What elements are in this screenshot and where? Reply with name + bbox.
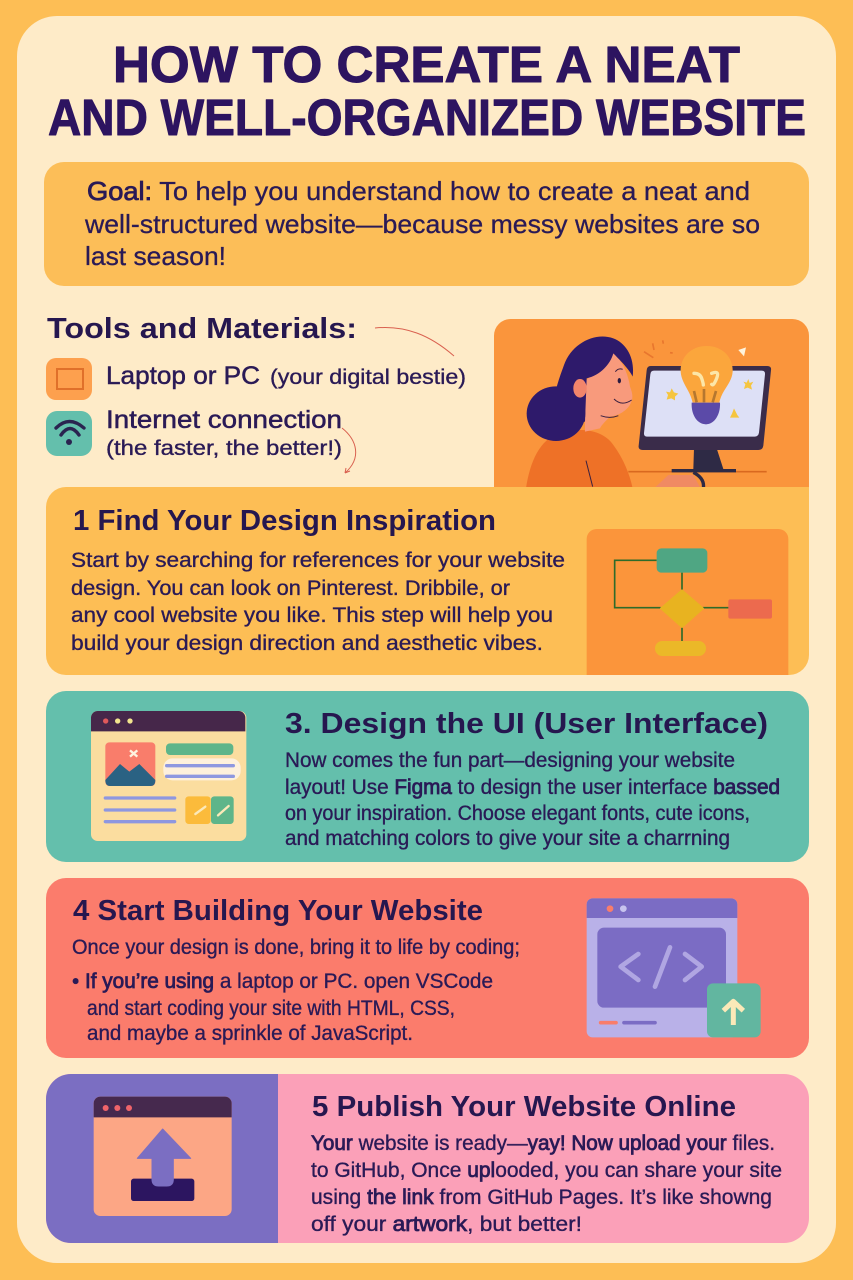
step 4 body: and start coding your site with HTML, CSS, [87,997,455,1020]
illustration: ui wireframe [91,711,246,841]
illustration: upload window [46,1074,278,1243]
arrow: to illustration [375,327,454,356]
step 1 body [71,549,565,655]
icon: wifi [46,411,92,456]
step 3 heading: 3. Design the UI (User Interface) [285,708,768,740]
panel: goal [44,162,809,286]
step 4 body: and maybe a sprinkle of JavaScript. [87,1022,413,1045]
step 3 body [285,749,780,850]
icon: laptop [46,358,92,400]
step 4 heading: 4 Start Building Your Website [73,895,483,927]
step 5 body [311,1132,782,1236]
panel: step 5 publish [46,1074,809,1243]
step 4 body [72,936,520,1045]
step 3 body: layout! Use Figma to design the user interface bassed [285,776,780,799]
illustration: person at monitor [494,319,809,489]
illustration: code window [587,898,761,1037]
step 1 body: Start by searching for references for your website [71,549,565,572]
step 1 body: design. You can look on Pinterest. Dribbile, or [71,577,510,600]
goal text: well-structured website—because messy websites are so [84,209,760,239]
step 5 body: using the link from GitHub Pages. It’s like showng [311,1186,772,1209]
monitor [639,366,771,472]
heading: tools and materials: Tools and Materials: [47,313,357,345]
step 3 body: on your inspiration. Choose elegant fonts, cute icons, [285,802,750,825]
title [48,36,806,146]
step 1 body: any cool website you like. This step will help you [71,604,553,627]
step 5 body: to GitHub, Once uplooded, you can share your site [311,1159,782,1182]
step 3 body: Now comes the fun part—designing your website [285,749,735,772]
illustration: flowchart [587,529,788,675]
arrow: curved down [342,428,356,473]
text: internet connection: (the faster, the better!) [106,437,342,460]
step 5 body: Your website is ready—yay! Now upload your files. [311,1132,775,1155]
text: laptop or pc: (your digital bestie) [270,366,466,389]
step 1 heading: 1 Find Your Design Inspiration [73,505,496,537]
goal text: Goal: To help you understand how to create a neat and [87,176,750,206]
woman [526,336,704,488]
text: laptop or pc: Laptop or PC [106,362,260,390]
step 4 body: • If you’re using a laptop or PC. open VSCode [72,970,493,993]
step 5 body: off your artwork , but better! [311,1213,582,1236]
text: internet connection [106,406,342,460]
lightbulb [644,340,753,424]
goal text [84,176,760,271]
panel: step 3 design the ui [46,691,809,862]
title: HOW TO CREATE A NEAT [113,36,740,93]
panel: step 1 find your design inspiration [46,487,809,675]
panel: step 4 start building [46,878,809,1058]
step 1 body: build your design direction and aesthetic vibes. [71,632,543,655]
text: laptop or pc [106,362,466,390]
step 4 body: Once your design is done, bring it to life by coding; [72,936,520,959]
step 5 heading: 5 Publish Your Website Online [312,1091,736,1123]
goal text: last season! [85,241,226,271]
text: internet connection: Internet connection [106,406,342,434]
step 3 body: and matching colors to give your site a charrning [285,827,730,850]
